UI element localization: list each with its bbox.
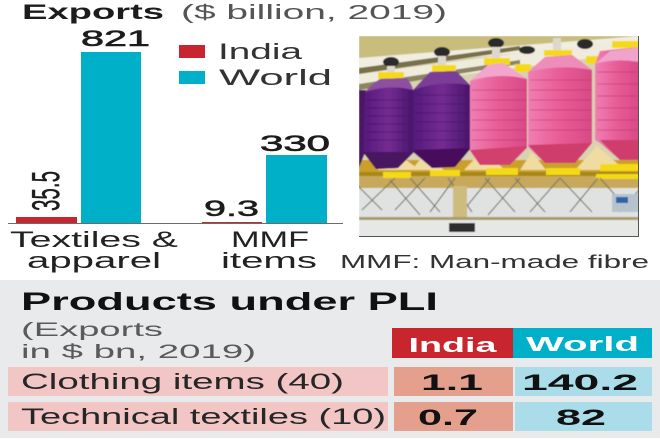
- note: exports in $ bn, 2019: [21, 320, 256, 363]
- bar: India textiles: [16, 217, 77, 223]
- panel: products under PLI: [0, 280, 660, 438]
- table header: World: World: [526, 334, 639, 356]
- row: Clothing items: 1.1: [421, 370, 483, 395]
- purple spools: [359, 90, 366, 168]
- heading: Products under PLI: Products under PLI: [21, 288, 438, 316]
- spindle tops: [383, 57, 399, 67]
- row: Clothing items: Clothing items (40): [21, 369, 344, 394]
- note: exports in $ bn, 2019: in $ bn, 2019): [21, 342, 256, 363]
- row: Technical textiles: Technical textiles (10): [21, 404, 386, 429]
- cones under spools: [378, 160, 415, 171]
- row: Technical textiles: 0.7: [418, 405, 478, 430]
- label: MMF items: MMF: [231, 227, 309, 252]
- title: Exports ($ billion, 2019): Exports: [22, 1, 164, 24]
- table header: World: [513, 328, 652, 358]
- value: 9.3: 9.3: [204, 196, 259, 221]
- value: 330: 330: [260, 131, 330, 156]
- thread windings: [366, 95, 469, 140]
- yarn lines: [352, 178, 639, 215]
- bar: India MMF: [202, 222, 262, 224]
- footnote: MMF definition: MMF: Man-made fibre: [340, 251, 649, 272]
- legend: India: [218, 39, 303, 64]
- value: 821: 821: [81, 26, 150, 51]
- photo border: [358, 36, 638, 236]
- label: Textiles & apparel: Textiles &: [10, 227, 179, 252]
- note: exports in $ bn, 2019: (Exports: [21, 320, 163, 341]
- row: Clothing items: 140.2: [522, 370, 638, 395]
- lower frame: [359, 187, 638, 218]
- legend swatch: India: [179, 45, 205, 58]
- label: MMF items: items: [221, 248, 317, 273]
- label: Textiles & apparel: apparel: [27, 248, 161, 273]
- table header: India: India: [408, 335, 498, 357]
- pink spools: [470, 63, 527, 165]
- title: Exports ($ billion, 2019): ($ billion, 2019): [181, 2, 447, 24]
- table header: India: [392, 328, 513, 358]
- label: Textiles & apparel: [10, 227, 179, 273]
- row: Clothing items: [8, 367, 652, 396]
- title: Exports ($ billion, 2019): [22, 1, 447, 24]
- bar chart: exports: [8, 26, 343, 273]
- yellow caps: [378, 72, 404, 79]
- legend swatch: World: [179, 71, 205, 84]
- legend: [179, 39, 332, 90]
- bar: World textiles: [81, 52, 141, 223]
- bar: World MMF: [266, 155, 327, 223]
- row: Technical textiles: [8, 402, 652, 431]
- row: Technical textiles: 82: [556, 405, 606, 430]
- photo illustration: spools of man-made fibre: [352, 36, 639, 237]
- legend: World: [219, 65, 332, 90]
- label: MMF items: [221, 227, 317, 273]
- value: 35.5 rotated: 35.5: [25, 171, 68, 211]
